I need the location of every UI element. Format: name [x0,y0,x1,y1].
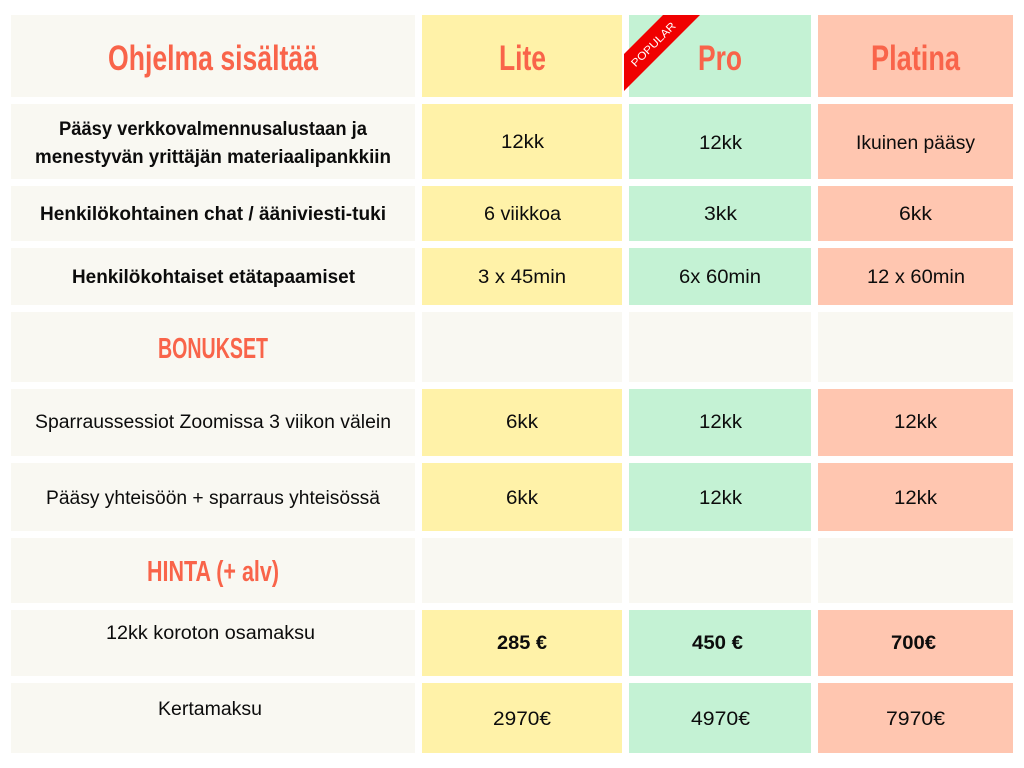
heading: Lite [422,15,622,97]
row: Zoom sparring sessions: 6kk [506,412,539,433]
heading: Lite: Lite [499,39,546,78]
section heading row: BONUKSET: BONUKSET [158,333,268,365]
section heading row: HINTA [11,538,1013,603]
row: Zoom sparring sessions: 12kk [894,412,938,433]
label: platform access [35,119,391,168]
row: one-off price: Kertamaksu [158,699,262,720]
label: platform access: menestyvän yrittäjän materiaalipankkiin [35,147,391,168]
row: community access: 6kk [506,488,539,509]
header row [11,15,1013,97]
row: instalment price [11,610,1013,676]
row: one-off price [11,683,1013,753]
row: one-off price: 4970€ [691,709,750,730]
row: chat support: Henkilökohtainen chat / ääniviesti-tuki [40,204,386,225]
title: Ohjelma sisältää: Ohjelma sisältää [108,39,318,78]
row: instalment price: 450 € [692,633,743,654]
heading: Pro [629,15,811,97]
row: chat support [11,186,1013,241]
row: instalment price: 12kk koroton osamaksu [106,623,315,644]
row: Zoom sparring sessions [11,389,1013,456]
row: remote meetings: 3 x 45min [478,267,566,288]
row: chat support: 6kk [899,204,933,225]
row: remote meetings: Henkilökohtaiset etätapaamiset [72,267,356,288]
row: platform access [11,104,1013,179]
title: Ohjelma sisältää [11,15,415,97]
section heading row: BONUKSET [11,312,1013,382]
row: community access: 12kk [894,488,938,509]
row: platform access: 12kk [699,133,743,154]
popular ribbon: POPULAR [629,20,679,70]
row: platform access: Ikuinen pääsy [856,133,976,154]
row: instalment price: 700€ [891,633,936,654]
row: community access: Pääsy yhteisöön + sparraus yhteisössä [46,488,380,509]
popular ribbon [624,15,700,91]
row: community access: 12kk [699,488,743,509]
row: instalment price: 285 € [497,633,547,654]
row: remote meetings [11,248,1013,305]
section heading row: HINTA: HINTA (+ alv) [147,556,279,588]
heading: Platina: Platina [871,39,960,78]
label: platform access: Pääsy verkkovalmennusalustaan ja [59,119,367,140]
row: remote meetings: 6x 60min [679,267,761,288]
row: Zoom sparring sessions: Sparraussessiot Zoomissa 3 viikon välein [35,412,391,433]
row: one-off price: 7970€ [886,709,945,730]
row: one-off price: 2970€ [493,709,551,730]
row: community access [11,463,1013,531]
row: Zoom sparring sessions: 12kk [699,412,743,433]
row: remote meetings: 12 x 60min [867,267,965,288]
row: chat support: 6 viikkoa [484,204,561,225]
heading: Pro: Pro [698,39,742,78]
heading: Platina [818,15,1013,97]
row: chat support: 3kk [704,204,738,225]
row: platform access: 12kk [501,132,545,153]
